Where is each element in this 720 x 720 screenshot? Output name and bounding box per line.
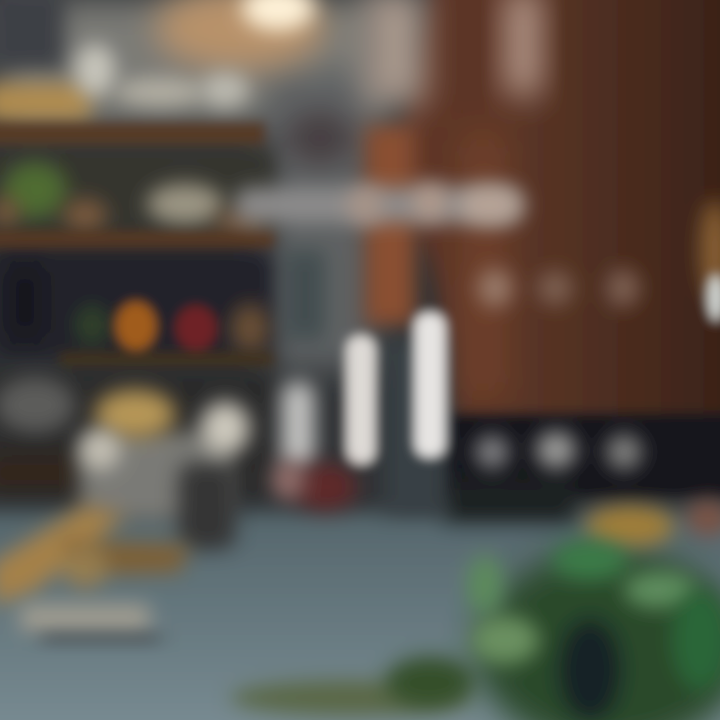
top shelf with items (0, 44, 354, 162)
lamp glow (155, 0, 325, 70)
lower shelf containers (0, 377, 80, 489)
row of spice jars (10, 250, 325, 365)
black waistband (445, 414, 720, 522)
horizontal pale band (235, 183, 522, 224)
bowl with food (80, 390, 249, 550)
pale dots on torso (478, 269, 639, 307)
napkin on table (20, 604, 160, 644)
fries on table (0, 505, 190, 605)
middle shelf with items (0, 162, 275, 247)
table surface (0, 512, 720, 720)
torso (365, 0, 720, 420)
green herbs foreground (230, 500, 720, 720)
pale vertical bottles (272, 312, 446, 515)
